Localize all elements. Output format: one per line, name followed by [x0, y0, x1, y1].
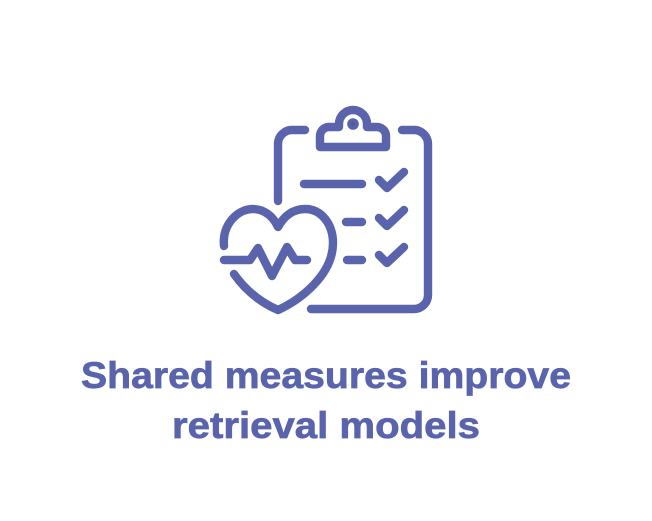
icon: clipboard with heart [224, 110, 428, 310]
checklist lines [304, 184, 362, 260]
clipboard clip [320, 110, 386, 147]
clip hole [347, 118, 359, 130]
title line 1: Shared measures improve [81, 355, 571, 396]
check marks [379, 172, 404, 263]
clipboard outline [278, 130, 428, 309]
heart [224, 209, 333, 310]
title [81, 355, 571, 446]
title line 2: retrieval models [172, 405, 480, 446]
heartbeat line [224, 247, 307, 276]
